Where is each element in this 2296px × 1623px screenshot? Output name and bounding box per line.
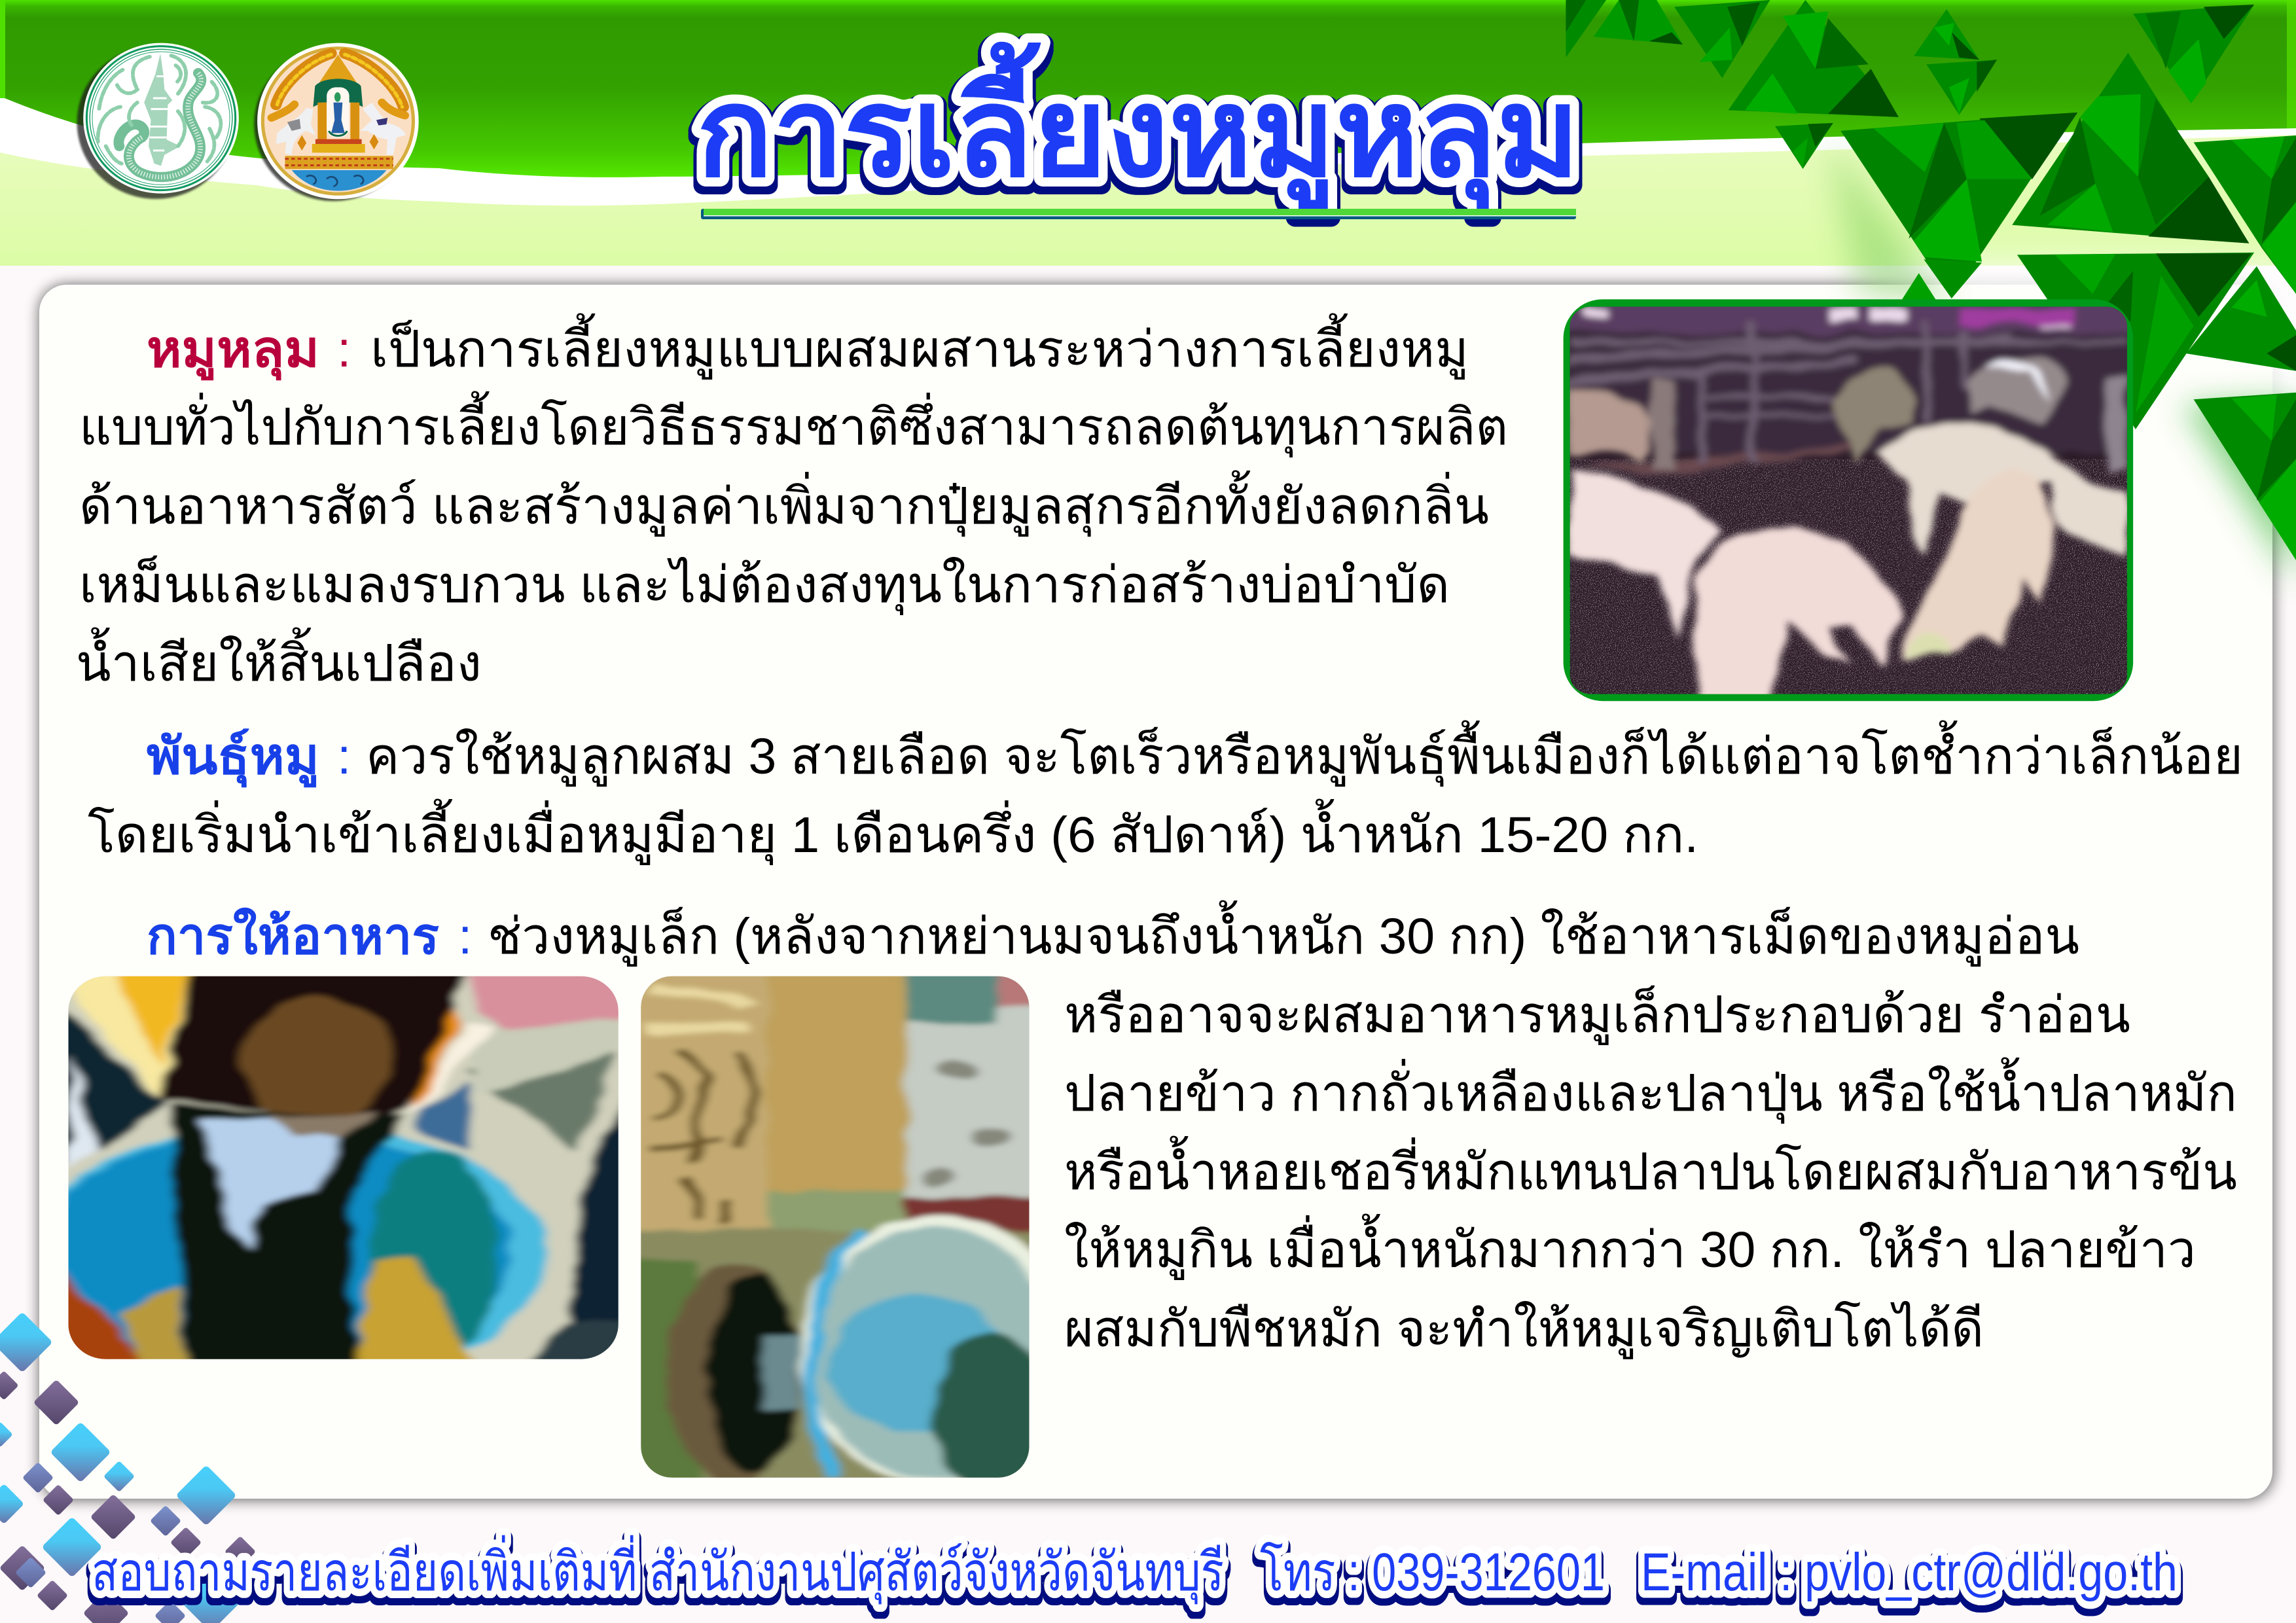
shrine bbox=[317, 54, 358, 85]
colon: : bbox=[337, 321, 351, 378]
line 4: เหม็นและแมลงรบกวน และไม่ต้องสงทุนในการก่อสร้างบ่อบำบัด bbox=[79, 555, 1450, 615]
line 1: เป็นการเลี้ยงหมูแบบผสมผสานระหว่างการเลี้ยงหมู bbox=[370, 313, 1469, 380]
line 4: หรือน้ำหอยเชอรี่หมักแทนปลาปนโดยผสมกับอาหารข้น bbox=[1064, 1135, 2237, 1200]
triangle G bbox=[2133, 5, 2254, 103]
triangle C bbox=[1674, 0, 1770, 78]
photo: pouring fermented liquid into blue basin bbox=[68, 976, 619, 1359]
paragraph: feeding bbox=[147, 900, 2237, 1359]
photo: feed ingredients collage bbox=[641, 976, 1029, 1478]
main content panel bbox=[39, 285, 2272, 1499]
title underline bbox=[701, 209, 1576, 219]
line 3: ปลายข้าว กากถั่วเหลืองและปลาปุ่น หรือใช้น้ำปลาหมัก bbox=[1064, 1057, 2237, 1124]
line 1: ช่วงหมูเล็ก (หลังจากหย่านมจนถึงน้ำหนัก 30 กก) ใช้อาหารเม็ดของหมูอ่อน bbox=[488, 900, 2079, 967]
base band bbox=[285, 156, 393, 169]
flame arcs bbox=[272, 54, 406, 118]
paragraph: breeds bbox=[88, 720, 2243, 865]
soft green glow bbox=[2183, 399, 2296, 583]
triangle A bbox=[1566, 0, 1606, 58]
triangle O bbox=[1901, 273, 1937, 300]
line 2: แบบทั่วไปกับการเลี้ยงโดยวิธีธรรมชาติซึ่งสามารถลดต้นทุนการผลิต bbox=[79, 391, 1508, 457]
line 5: น้ำเสียให้สิ้นเปลือง bbox=[76, 627, 482, 692]
footer: inquiry and office: สอบถามรายละเอียดเพิ่มเติมที่ สำนักงานปศุสัตว์จังหวัดจันทบุรี bbox=[92, 1535, 1224, 1605]
triangle I bbox=[1840, 113, 2077, 298]
heading: breeds: พันธุ์หมู bbox=[147, 728, 319, 788]
triangle E bbox=[1914, 9, 1979, 60]
colon: : bbox=[458, 908, 472, 965]
scroll ornaments bbox=[98, 56, 221, 164]
triangle B bbox=[1594, 0, 1683, 45]
gem ornaments bbox=[297, 134, 378, 151]
triangle L bbox=[2017, 253, 2254, 429]
heading: pit pig: หมูหลุม bbox=[147, 321, 319, 381]
panel shadow bbox=[39, 285, 2274, 1500]
soft glow left of big triangle bbox=[1828, 137, 1949, 303]
logo: Chanthaburi provincial seal bbox=[254, 43, 419, 201]
footer: phone: โทร : 039-312601 bbox=[1260, 1543, 1605, 1602]
triangle N bbox=[2194, 393, 2296, 560]
deity figure bbox=[144, 54, 180, 166]
triangle M bbox=[2186, 266, 2296, 371]
line 5: ให้หมูกิน เมื่อน้ำหนักมากกว่า 30 กก. ให้รำ ปลายข้าว bbox=[1064, 1213, 2196, 1280]
naga bbox=[118, 73, 201, 177]
footer: email: E-mail : pvlo_ctr@dld.go.th bbox=[1641, 1543, 2178, 1602]
header banner bbox=[0, 0, 2296, 266]
logo: department of livestock seal bbox=[77, 43, 239, 199]
paragraph: pit pig raising bbox=[76, 313, 1508, 692]
horses bbox=[276, 108, 315, 155]
colon: : bbox=[337, 728, 351, 785]
heading: feeding: การให้อาหาร bbox=[147, 906, 439, 965]
triangle K bbox=[2194, 135, 2296, 294]
triangle H bbox=[1775, 123, 1833, 169]
line 3: ด้านอาหารสัตว์ และสร้างมูลค่าเพิ่มจากปุ๋ยมูลสุกรอีกทั้งยังลดกลิ่น bbox=[79, 470, 1489, 537]
line 6: ผสมกับพืชหมัก จะทำให้หมูเจริญเติบโตได้ดี bbox=[1064, 1300, 1984, 1359]
triangle D bbox=[1729, 0, 1899, 117]
triangle J bbox=[2012, 53, 2249, 243]
line 2: หรืออาจจะผสมอาหารหมูเล็กประกอบด้วย รำอ่อน bbox=[1064, 985, 2130, 1045]
photo: pigs rooting in pit pen bbox=[1556, 294, 2141, 707]
decorative diamonds bbox=[0, 1311, 256, 1623]
title: การเลี้ยงหมูหลุม bbox=[696, 41, 1580, 210]
line 1: ควรใช้หมูลูกผสม 3 สายเลือด จะโตเร็วหรือหมูพันธุ์พื้นเมืองก็ได้แต่อาจโตช้ำกว่าเล็กน้อย bbox=[366, 720, 2243, 787]
line 2: โดยเริ่มนำเข้าเลี้ยงเมื่อหมูมีอายุ 1 เดือนครึ่ง (6 สัปดาห์) น้ำหนัก 15-20 กก. bbox=[88, 798, 1698, 865]
triangle F bbox=[1926, 60, 1997, 115]
water bbox=[292, 170, 386, 191]
green triangle decoration bbox=[1566, 0, 2296, 583]
white glow behind triangles bbox=[1872, 268, 2296, 458]
footer contact line bbox=[92, 1535, 2178, 1605]
